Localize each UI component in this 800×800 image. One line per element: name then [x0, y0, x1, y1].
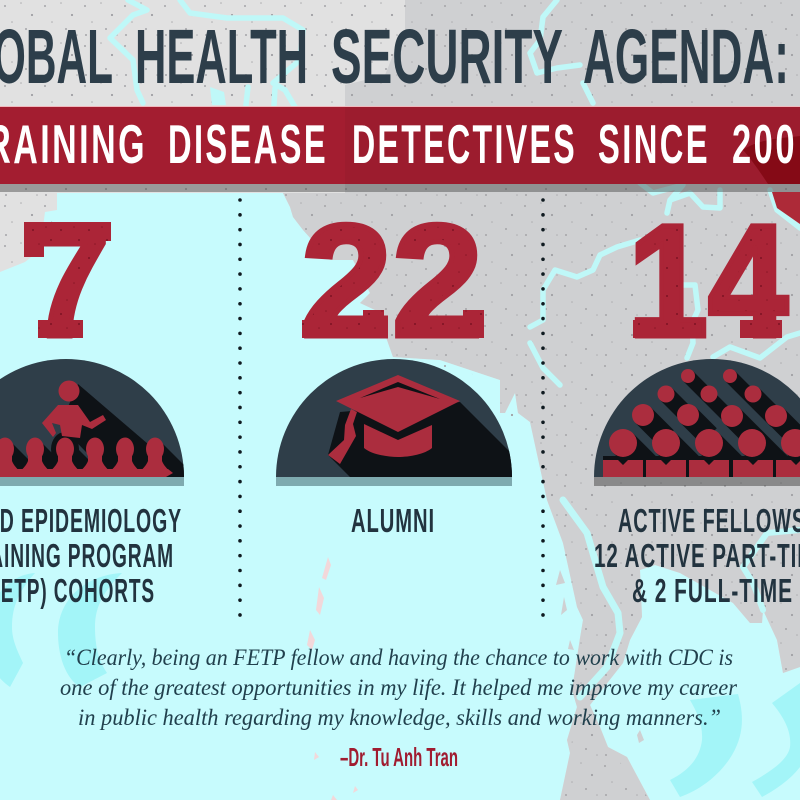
number 22: 22 — [301, 191, 483, 370]
quote — [60, 645, 738, 731]
caption: active fellows — [594, 502, 800, 609]
number 7: 7 — [28, 191, 110, 370]
river blob — [210, 87, 226, 105]
map rivers and borders — [110, 0, 800, 697]
title: HEALTH — [135, 14, 308, 100]
icon: graduation cap dome — [276, 359, 530, 486]
islands — [307, 557, 358, 800]
banner text: DISEASE — [168, 113, 328, 175]
quote: one of the greatest opportunities in my life. It helped me improve my career — [60, 675, 738, 701]
banner text — [0, 113, 797, 175]
quote attribution: –Dr. Tu Anh Tran — [340, 742, 458, 772]
divider: left — [238, 200, 242, 616]
closing quote mark — [670, 683, 800, 797]
banner text: SINCE — [598, 113, 710, 175]
caption: alumni: ALUMNI — [351, 502, 435, 539]
icon: presenter and audience dome — [0, 359, 196, 486]
coast islands — [556, 570, 644, 743]
red region on map — [772, 192, 800, 224]
opening quote mark — [0, 573, 122, 687]
banner — [0, 106, 800, 192]
quote: in public health regarding my knowledge, skills and working manners.” — [78, 705, 721, 731]
title — [0, 14, 789, 100]
quote: “Clearly, being an FETP fellow and having the chance to work with CDC is — [64, 645, 733, 671]
icon: fellows dome — [594, 359, 800, 486]
divider: right — [541, 200, 545, 616]
banner dark overlay — [743, 136, 800, 184]
title: SECURITY — [331, 14, 563, 100]
banner text: DETECTIVES — [352, 113, 577, 175]
caption: FETP cohorts — [0, 502, 182, 609]
